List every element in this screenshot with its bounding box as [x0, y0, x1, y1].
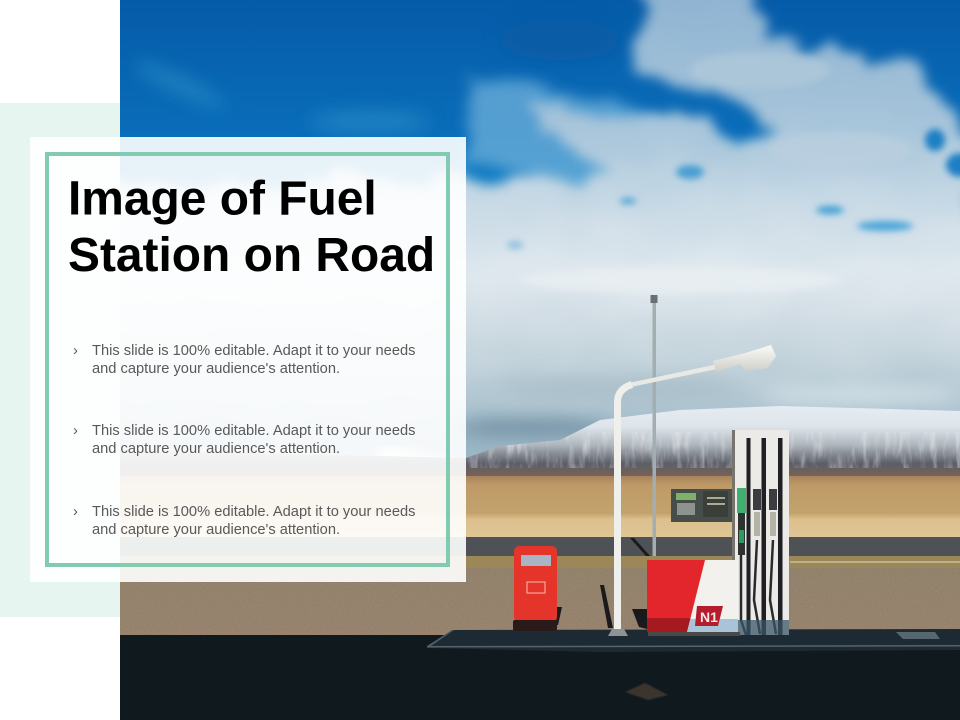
bullet 1: This slide is 100% editable. Adapt it to your needs [92, 343, 415, 359]
bullet 3: This slide is 100% editable. Adapt it to your needs [92, 504, 415, 520]
ground shadows [556, 538, 650, 629]
sky with clouds [100, 0, 960, 460]
snowy mountains [120, 406, 960, 478]
panel: translucent white card [30, 137, 466, 582]
bullet 2: › [73, 423, 78, 439]
fields [120, 476, 960, 538]
bullet 3 [73, 504, 415, 538]
grass strip [120, 556, 960, 569]
bullet 1 [73, 343, 415, 377]
title: Image of Fuel [68, 172, 377, 226]
title: Station on Road [68, 229, 435, 282]
bullet 3: › [73, 504, 78, 520]
red mail bin [513, 546, 557, 631]
text panel [30, 137, 466, 582]
N1 pump cabinet [647, 560, 740, 636]
N1 pump cabinet: N1 [700, 609, 718, 625]
tall mast [650, 295, 658, 556]
bullet 2: and capture your audience's attention. [92, 441, 340, 457]
street lamp [608, 345, 776, 636]
gravel ground [120, 568, 960, 636]
panel: green outline frame [47, 154, 448, 565]
bullet 3: and capture your audience's attention. [92, 522, 340, 538]
road [120, 537, 960, 556]
pump island platform [427, 629, 960, 652]
bullet 2 [73, 423, 415, 457]
bullet 1: and capture your audience's attention. [92, 361, 340, 377]
bullet 2: This slide is 100% editable. Adapt it to your needs [92, 423, 415, 439]
shadowed foreground [120, 635, 960, 720]
mint accent block [0, 103, 120, 617]
bullet 1: › [73, 343, 78, 359]
payment terminal board [671, 489, 735, 522]
foreground patch [625, 683, 668, 700]
fuel pump columns [732, 430, 789, 635]
